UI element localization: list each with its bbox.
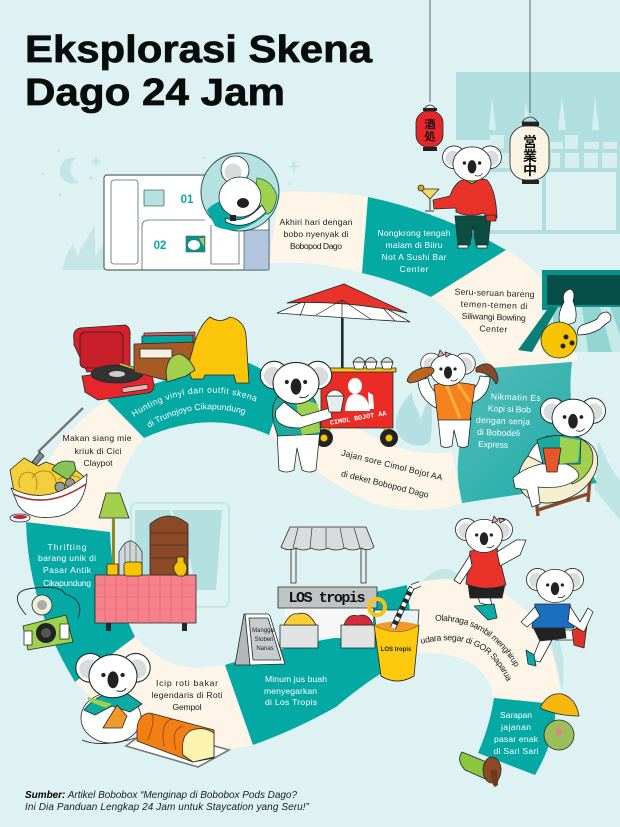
text: step 6: Hunting vinyl dan outfit skena — [131, 387, 256, 417]
text: step 8: Cikapundung — [43, 578, 91, 588]
plant: grass by pod — [63, 226, 105, 270]
icon: cream lantern: 業 — [523, 146, 537, 166]
text: step 8: Pasar Antik — [43, 565, 92, 575]
text: step 8 — [38, 542, 96, 588]
cimol cart — [315, 358, 398, 447]
text: step 4: di Bobodeli — [477, 427, 520, 438]
icon: cocktail glass — [418, 185, 439, 211]
panel: step 2 bar segment — [362, 197, 506, 297]
koala sitting in chair with coffee — [507, 398, 609, 516]
source note: Sumber: Artikel Bobobox “Menginap di Bobobox Pods Dago? — [25, 790, 297, 801]
panel: step 12 sarapan segment — [478, 698, 555, 775]
text: step 7: Claypot — [84, 458, 113, 468]
icon: red lantern: 処 — [424, 128, 436, 144]
text: step 5: di deket Bobopod Dago — [340, 468, 430, 500]
icon: cup of cimol — [326, 390, 344, 412]
source note: Ini Dia Panduan Lengkap 24 Jam untuk Staycation yang Seru!” — [25, 802, 310, 813]
text: step 3: temen-temen di — [461, 299, 528, 311]
text: step 2: malam di Biiru — [386, 240, 443, 250]
source note — [25, 790, 310, 813]
text: step 10: menyegarkan — [264, 686, 317, 696]
koala selling cimol — [260, 361, 344, 472]
text: step 1: bobo nyenyak di — [284, 229, 349, 239]
sleeping koala circle — [201, 153, 279, 231]
text: step 4 — [475, 391, 541, 451]
panel: step 10 jus segment — [225, 585, 415, 745]
umbrella — [277, 284, 410, 370]
night sky: moon and sparkles — [42, 150, 300, 196]
text: step 2 — [378, 228, 451, 274]
clothes rack behind thrift table — [131, 503, 229, 607]
thrift table with antiques — [95, 493, 196, 631]
text: step 9: legendaris di Roti — [152, 690, 223, 700]
koala with bread and croissant — [407, 350, 498, 448]
icon: cream lantern: 営 — [523, 132, 537, 152]
text: step 9: Gempol — [172, 702, 202, 712]
green beanie — [166, 354, 195, 382]
menu sandwich board: Nanas — [256, 646, 274, 652]
panel: step 8 thrifting segment — [26, 522, 135, 682]
icon: wooden drawers — [150, 516, 188, 575]
icon: table lamp — [99, 493, 129, 575]
stall sign: LOS tropis — [288, 590, 366, 607]
panel: step 5 cimol segment — [269, 387, 462, 510]
text: step 4: Express — [478, 439, 508, 450]
text: step 2: Nongkrong tengah — [378, 228, 451, 238]
juice glass: LOS tropis — [381, 647, 412, 653]
icon: bowling pin fallen — [578, 312, 611, 335]
label: 02: 02 — [154, 240, 166, 252]
text: step 7: kriuk di Cici — [74, 446, 122, 456]
panel: step 6 vinyl segment — [107, 363, 285, 438]
text: step 11 — [420, 614, 518, 682]
text: step 1 — [280, 217, 353, 251]
text: step 4: Kopi si Bob — [488, 403, 531, 415]
icon: small picture — [186, 236, 205, 252]
box of vinyl records — [134, 332, 195, 380]
koala running with blue shirt — [521, 568, 593, 666]
text: step 8: Thrifting — [48, 542, 87, 552]
text: step 12: jajanan — [500, 722, 531, 732]
juice glass — [369, 584, 420, 681]
icon: red lantern: 酒 — [424, 116, 436, 132]
los tropis fruit stall — [278, 527, 377, 648]
cups of cimol — [353, 358, 393, 369]
text: step 2: Not A Sushi Bar — [382, 252, 447, 262]
text: step 10: Minum jus buah — [265, 674, 327, 684]
panel: step 11 olahraga segment — [407, 579, 561, 705]
icon: bowling ball — [541, 322, 577, 358]
koala at bar with cocktail — [418, 146, 501, 248]
text: step 8: barang unik di — [38, 553, 96, 563]
koala running with red top — [454, 516, 526, 620]
text: step 10: di Los Tropis — [265, 697, 317, 707]
text: step 7: Makan siang mie — [62, 433, 132, 443]
text: step 3: Siliwangi Bowling — [462, 311, 526, 323]
bread loaf on tray — [126, 713, 229, 767]
text: step 12: Sarapan — [500, 710, 532, 720]
building silhouette — [456, 72, 620, 232]
text: step 3: Seru-seruan bareng — [454, 287, 535, 299]
text: step 9 — [152, 678, 223, 712]
panel: step 1 bobopod segment — [269, 192, 368, 273]
text: step 9: Icip roti bakar — [156, 678, 218, 688]
text: step 2: Center — [400, 264, 429, 274]
title: Dago 24 Jam — [25, 72, 285, 114]
green camera — [17, 587, 80, 650]
text: step 11: Olahraga sambil menghirup — [436, 614, 518, 666]
menu sandwich board: Mangga — [252, 628, 275, 634]
icon: coffee cup — [543, 448, 561, 472]
icon: green roll with chocolate — [460, 752, 501, 787]
text: step 7 — [62, 433, 132, 468]
vinyl record player — [74, 325, 154, 400]
icon: green cake — [544, 720, 574, 750]
hills behind sports koalas — [420, 569, 564, 690]
text: step 1: Akhiri hari dengan — [280, 217, 353, 227]
text: step 12: di Sari Sari — [494, 746, 539, 756]
title — [25, 29, 373, 114]
bowling lane — [518, 270, 620, 358]
text: step 1: Bobopod Dago — [290, 241, 342, 251]
plant: behind cart — [396, 392, 432, 446]
text: step 10 — [264, 674, 327, 707]
label: 01: 01 — [181, 194, 194, 206]
text: step 11: udara segar di GOR Saparua — [420, 636, 510, 682]
text: step 12: pasar enak — [494, 734, 539, 744]
icon: red lantern — [416, 0, 443, 151]
text: step 3 — [453, 287, 535, 335]
panel: step 9 roti segment — [75, 637, 253, 749]
panel: step 3 bowling segment — [431, 250, 578, 372]
text: step 6: di Trunojoyo Cikapundung — [148, 403, 246, 428]
plant: behind chair — [595, 440, 620, 520]
cart logo: CIMOL BOJOT AA — [330, 410, 388, 428]
text: step 3: Center — [479, 323, 508, 334]
koala eating bread toast — [76, 653, 150, 744]
text: step 4: Nikmatin Es — [491, 391, 541, 403]
icon: cream lantern — [510, 0, 549, 184]
bobopod floor plan — [104, 153, 279, 270]
bowl of noodles — [10, 408, 87, 522]
icon: cream lantern: 中 — [523, 160, 537, 180]
text: step 12 — [494, 710, 539, 756]
text: step 5 — [340, 448, 444, 500]
icon: bowling pin upright — [559, 289, 576, 325]
text: step 5: Jajan sore Cimol Bojot AA — [340, 448, 444, 482]
icon: birdcage — [119, 540, 142, 575]
panel: step 7 mie segment — [26, 400, 144, 532]
yellow sweater — [189, 317, 249, 383]
icon: croissant — [476, 364, 498, 384]
menu sandwich board: Stoberi — [254, 637, 274, 643]
title: Eksplorasi Skena — [25, 29, 373, 71]
text: step 4: dengan senja — [476, 415, 530, 427]
icon: taco snack — [540, 694, 579, 716]
menu sandwich board — [235, 614, 285, 665]
icon: baguette bread — [407, 367, 434, 383]
panel: step 4 kopi segment — [458, 362, 597, 503]
